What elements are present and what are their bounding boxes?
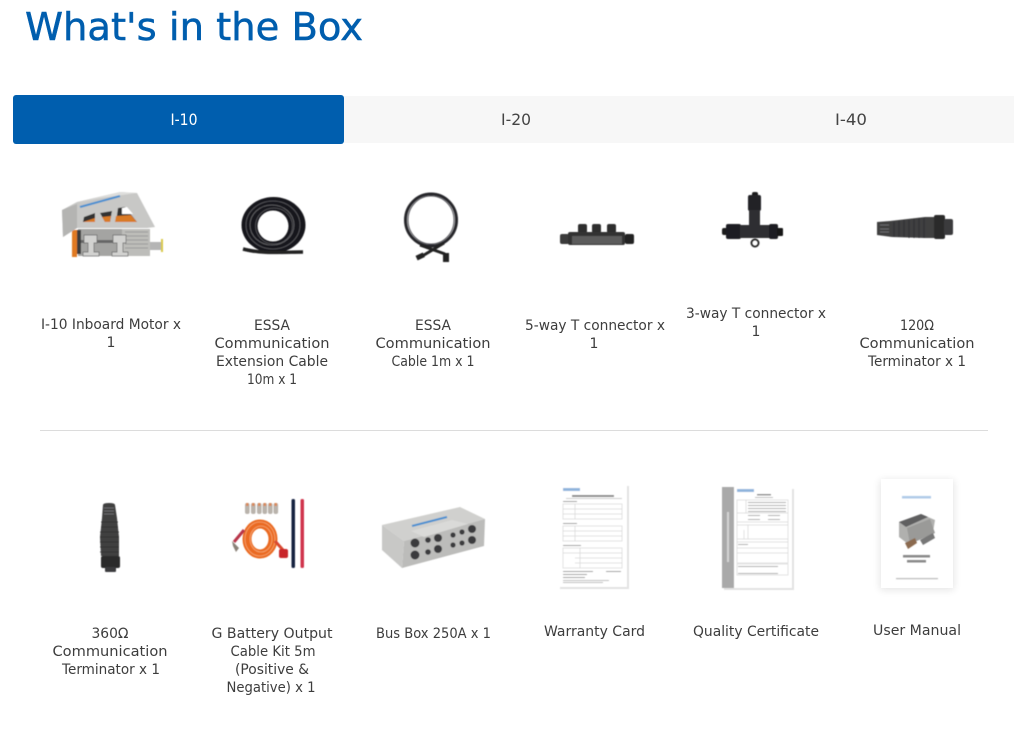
item: I-10 Inboard Motor — [41, 192, 181, 351]
label: Terminator x 1 — [61, 662, 160, 678]
icon: battery cable kit — [232, 499, 304, 568]
item: ESSA Communication Extension Cable 10m — [214, 197, 330, 388]
item: Warranty Card — [544, 484, 645, 640]
label — [860, 318, 974, 370]
tab: I-10 active: I-10 — [170, 110, 198, 129]
label: Warranty Card — [544, 624, 645, 640]
item: 120 ohm terminator — [860, 215, 974, 370]
label: 1 — [107, 335, 115, 351]
label: (Positive & — [235, 662, 309, 678]
label: Communication — [860, 336, 974, 352]
label — [41, 317, 181, 351]
tab bar — [13, 95, 1014, 144]
label: Communication — [376, 336, 490, 352]
icon: bus box — [382, 507, 485, 568]
label: ESSA — [415, 318, 451, 334]
icon: certificate document — [722, 487, 794, 590]
item: User Manual — [873, 479, 961, 639]
label: Cable Kit 5m — [230, 644, 316, 660]
icon: warranty document — [558, 484, 629, 589]
label — [525, 318, 665, 352]
label: 10m x 1 — [247, 372, 297, 388]
icon: cable loop — [406, 194, 456, 262]
title: What's in the Box — [25, 5, 363, 49]
label: Communication — [52, 644, 168, 660]
item: Quality Certificate — [693, 487, 819, 640]
icon: 3-way connector — [722, 192, 783, 247]
tab: I-40: I-40 — [835, 110, 867, 129]
label: I-10 Inboard Motor x — [41, 317, 181, 333]
label — [52, 626, 168, 678]
item: 3-way T connector — [686, 192, 826, 340]
icon: 5-way connector — [560, 224, 634, 245]
label: G Battery Output — [212, 626, 333, 642]
label: 5-way T connector x — [525, 318, 665, 334]
label: Extension Cable — [216, 354, 328, 370]
label: Communication — [214, 336, 330, 352]
tab: I-20: I-20 — [501, 110, 531, 129]
icon: terminator — [877, 215, 953, 239]
icon: coiled cable — [242, 197, 306, 253]
label — [376, 318, 490, 370]
label — [214, 318, 330, 388]
label — [686, 306, 826, 340]
label: Cable 1m x 1 — [392, 354, 474, 370]
label: Bus Box 250A x 1 — [376, 626, 491, 642]
item: 5-way T connector — [525, 224, 665, 352]
label: 1 — [590, 336, 598, 352]
icon: user manual — [880, 479, 954, 590]
label: Terminator x 1 — [867, 354, 966, 370]
label — [212, 626, 333, 696]
label: ESSA — [254, 318, 290, 334]
item: Bus Box 250A — [376, 507, 491, 642]
item: G Battery Output Cable Kit — [212, 499, 333, 696]
label: 120Ω — [900, 318, 934, 334]
label: User Manual — [873, 623, 961, 639]
icon: terminator upright — [100, 503, 120, 572]
item: ESSA Communication Cable 1m — [376, 194, 490, 370]
icon: inboard motor — [62, 192, 163, 257]
label: Quality Certificate — [693, 624, 819, 640]
label: 1 — [752, 324, 760, 340]
tab: I-10 active — [13, 95, 344, 144]
label: 360Ω — [92, 626, 129, 642]
label: 3-way T connector x — [686, 306, 826, 322]
label: Negative) x 1 — [226, 680, 316, 696]
item: 360 ohm terminator — [52, 503, 168, 678]
